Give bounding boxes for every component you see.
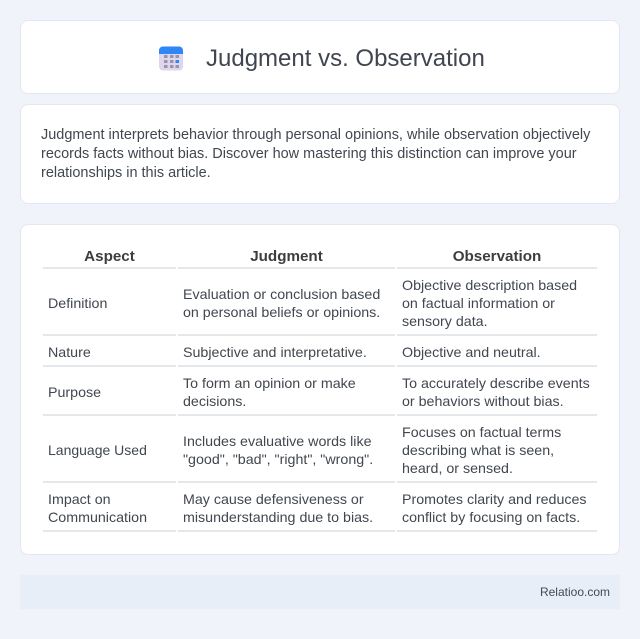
row: Definition: sensory data.	[402, 314, 488, 330]
intro text	[41, 127, 590, 181]
column heading: Judgment: Judgment	[250, 248, 323, 265]
intro text: records facts without bias. Discover how mastering this distinction can improve your	[41, 146, 577, 162]
row: Definition: on factual information or	[402, 296, 555, 312]
header card	[20, 20, 620, 94]
table card	[20, 224, 620, 555]
footer credit: Relatioo.com	[540, 585, 610, 599]
row: Nature: Nature	[48, 345, 91, 361]
row: Purpose: To accurately describe events	[402, 376, 590, 392]
row: Definition: Objective description based	[402, 278, 577, 294]
row: Definition: Definition	[48, 296, 107, 312]
row: Purpose: To form an opinion or make	[183, 376, 356, 392]
row: Impact on Communication: conflict by focusing on facts.	[402, 510, 580, 526]
row: Purpose: or behaviors without bias.	[402, 394, 564, 410]
row: Impact on Communication: misunderstanding due to bias.	[183, 510, 373, 526]
row: Impact on Communication: Promotes clarity and reduces	[402, 492, 587, 508]
title: Judgment vs. Observation	[206, 45, 485, 72]
row: Language Used: Includes evaluative words like	[183, 434, 372, 450]
column heading: Aspect: Aspect	[84, 248, 135, 265]
row: Purpose: decisions.	[183, 394, 246, 410]
row: Impact on Communication: Impact on	[48, 492, 111, 508]
row: Nature: Objective and neutral.	[402, 345, 541, 361]
row: Purpose: Purpose	[48, 385, 101, 401]
row: Language Used: heard, or sensed.	[402, 461, 513, 477]
footer bar	[20, 575, 620, 609]
row: Definition: Evaluation or conclusion based	[183, 287, 380, 303]
row: Language Used: Focuses on factual terms	[402, 425, 561, 441]
row: Definition: on personal beliefs or opinions.	[183, 305, 380, 321]
column heading: Observation: Observation	[453, 248, 541, 265]
intro text: relationships in this article.	[41, 165, 211, 181]
row: Language Used: Language Used	[48, 442, 147, 458]
row: Impact on Communication: May cause defensiveness or	[183, 492, 364, 508]
row: Language Used: "good", "bad", "right", "wrong".	[183, 452, 373, 468]
row: Impact on Communication: Communication	[48, 510, 147, 526]
intro text: Judgment interprets behavior through personal opinions, while observation objectively	[41, 127, 590, 143]
icon: calendar	[159, 46, 183, 70]
intro card	[20, 104, 620, 204]
row: Language Used: describing what is seen,	[402, 443, 554, 459]
row: Nature: Subjective and interpretative.	[183, 345, 367, 361]
